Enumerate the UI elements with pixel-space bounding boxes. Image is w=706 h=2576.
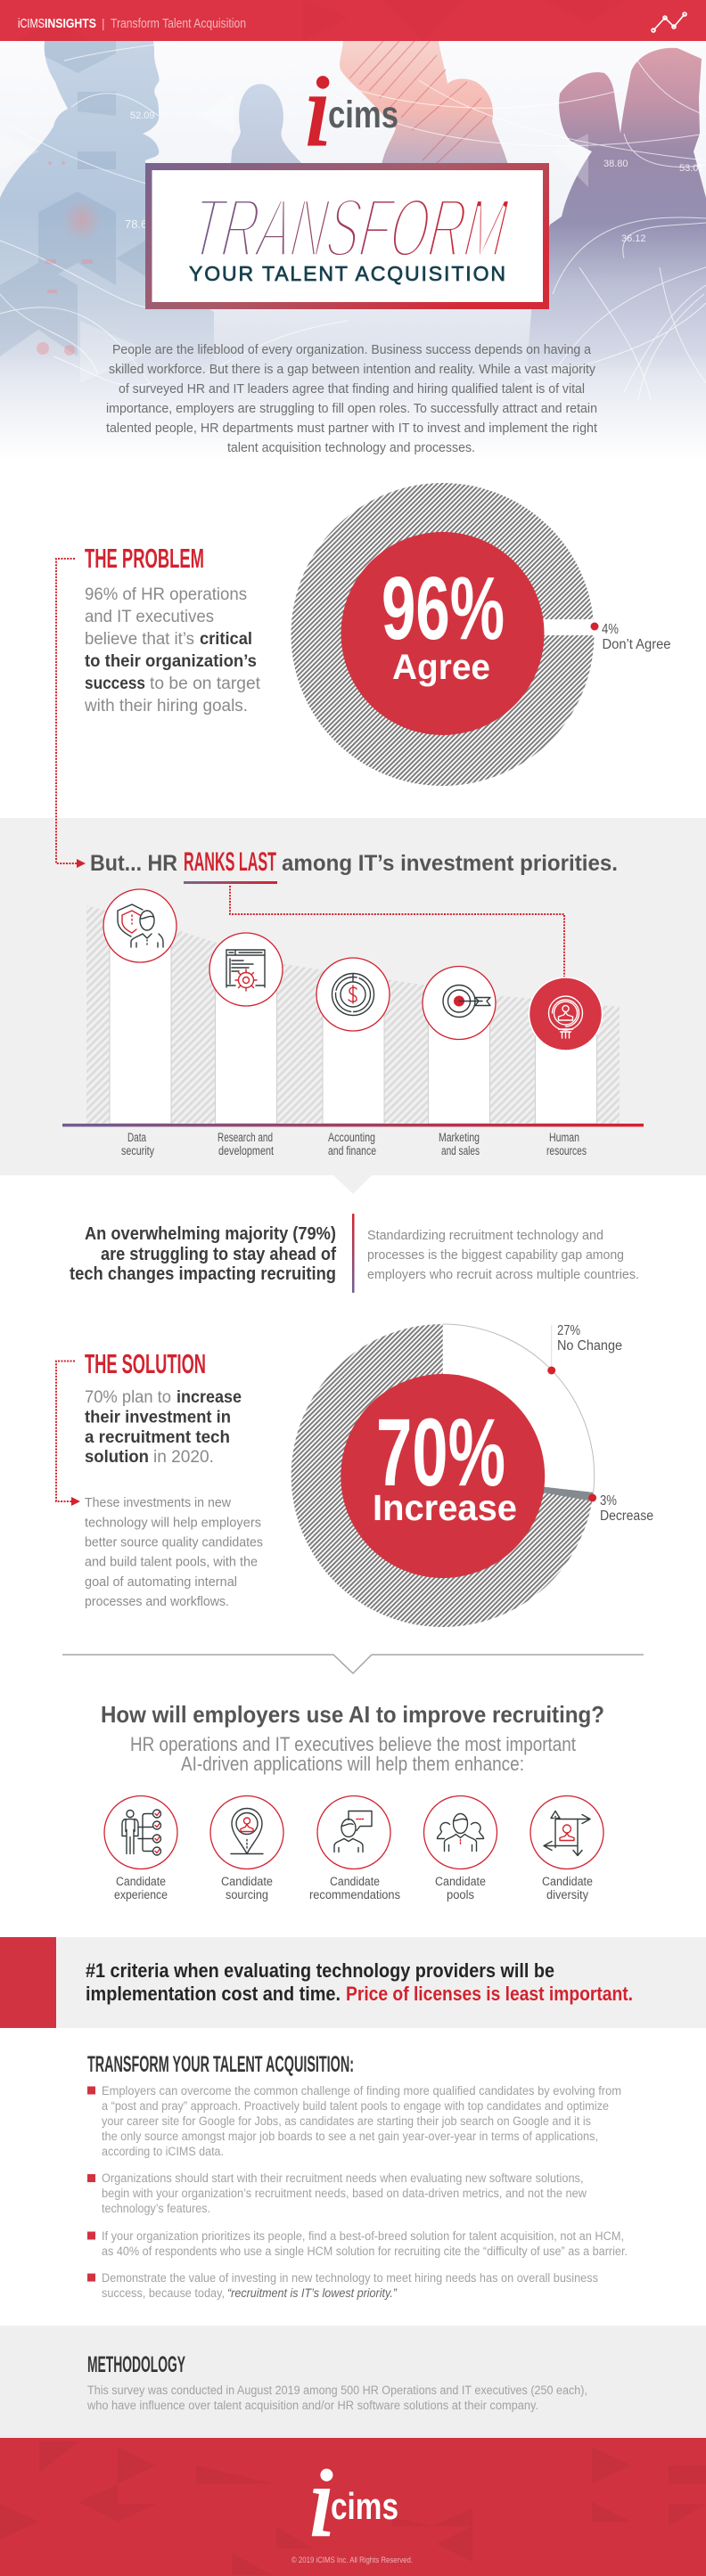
hero data readouts: 78.6: [125, 217, 147, 231]
bullet 2: technology’s features.: [102, 2202, 210, 2215]
heading: the solution: THE SOLUTION: [85, 1348, 206, 1379]
hero building hatch: [349, 41, 487, 165]
bar: human resources: [535, 1014, 597, 1124]
criteria text: [86, 1959, 633, 2005]
criteria text: Price of licenses is least important.: [346, 1983, 633, 2005]
iCIMS logo: i: [303, 53, 332, 167]
capability gap note: employers who recruit across multiple countries.: [367, 1267, 639, 1282]
hero red glow: [62, 199, 102, 241]
icon: browser window with gear: [209, 933, 283, 1006]
bullet 3: If your organization prioritizes its people, find a best-of-breed solution for talent acquisition, not an HCM,: [102, 2229, 624, 2243]
icon: human resources badge: [530, 977, 603, 1051]
bar: marketing and sales: [428, 1002, 490, 1124]
AI labels: Candidate: [435, 1875, 486, 1888]
slice: decrease: [443, 1476, 594, 1501]
copyright: © 2019 iCIMS Inc. All Rights Reserved.: [291, 2556, 413, 2565]
heading: AI question: How will employers use AI to improve recruiting?: [101, 1701, 604, 1728]
heading: recommendations: TRANSFORM YOUR TALENT ACQUISITION:: [87, 2052, 354, 2077]
chart category labels: security: [121, 1144, 154, 1157]
AI labels: Candidate: [116, 1875, 166, 1888]
AI labels: sourcing: [226, 1888, 268, 1901]
icon: candidate diversity: [530, 1796, 603, 1869]
hero red pips: [37, 161, 93, 356]
section divider with notch: [62, 1655, 644, 1673]
solution statement: in 2020.: [153, 1448, 214, 1467]
bullet 3: as 40% of respondents who use a single HCM solution for recruiting cite the “difficulty of use” as a barrier.: [102, 2245, 628, 2258]
AI labels: Candidate: [542, 1875, 593, 1888]
panel: 79 percent stat: [70, 1214, 639, 1293]
chart category labels: Marketing: [439, 1131, 480, 1144]
vertical divider: [352, 1214, 355, 1293]
icon: candidate pools: [424, 1796, 497, 1869]
AI labels: [114, 1875, 593, 1901]
callout: 4 percent: [590, 622, 670, 652]
criteria text: implementation cost and time.: [86, 1983, 341, 2005]
AI subheading: AI-driven applications will help them enhance:: [181, 1753, 524, 1775]
chart axis: [62, 1124, 644, 1126]
panel: methodology: [0, 2326, 706, 2438]
header brand: [18, 16, 246, 31]
stat statement: An overwhelming majority (79%): [85, 1224, 336, 1244]
solution detail: [85, 1495, 263, 1609]
header brand: |: [102, 16, 105, 30]
title: TRANSFORM: TRANSFORM: [186, 182, 513, 275]
methodology text: This survey was conducted in August 2019 among 500 HR Operations and IT executives (250 each),: [87, 2384, 587, 2397]
chart category labels: Human: [549, 1131, 579, 1144]
methodology text: [86, 2384, 587, 2412]
hero data readouts: 52.09: [130, 110, 155, 121]
intro paragraph: [106, 342, 598, 455]
iCIMS logo: [303, 53, 398, 167]
solution statement: [85, 1388, 242, 1467]
panel: criteria band: [0, 1937, 706, 2028]
value: 70%: 70%: [376, 1398, 505, 1506]
value: 96%: 96%: [382, 559, 505, 658]
hero background: [0, 41, 706, 461]
chart category labels: [121, 1131, 587, 1157]
hero data readouts: 53.07: [679, 163, 704, 174]
icon: shield and person: [103, 889, 176, 962]
bar: data security: [110, 926, 171, 1124]
solution statement: 70% plan to: [85, 1388, 171, 1407]
icon: candidate sourcing: [210, 1796, 283, 1869]
solution detail: goal of automating internal: [85, 1574, 237, 1590]
problem text: believe that it’s: [85, 630, 194, 649]
hero triangle pattern: [0, 41, 145, 356]
methodology text: who have influence over talent acquisition and/or HR software solutions at their company.: [86, 2399, 538, 2412]
headline: HR ranks last: [90, 847, 618, 884]
stat statement: tech changes impacting recruiting: [70, 1264, 336, 1284]
hero data readouts: [125, 110, 704, 244]
chart category labels: Accounting: [328, 1131, 375, 1144]
hero data readouts: 36.12: [621, 233, 646, 244]
chart category labels: and finance: [328, 1144, 376, 1157]
bullet 2: [87, 2171, 587, 2215]
value label: Agree: Agree: [392, 648, 490, 687]
callout: 3 percent: 3%: [600, 1493, 617, 1509]
panel: recommendations: [87, 2052, 628, 2300]
headline: HR ranks last: among IT’s investment priorities.: [282, 851, 618, 876]
callout: 27 percent: No Change: [557, 1338, 622, 1353]
header triangles: [18, 0, 624, 41]
dotted connector: ranks last to HR: [230, 886, 564, 977]
callout: 4 percent: Don’t Agree: [603, 637, 670, 652]
dotted connector: solution: [56, 1362, 80, 1506]
problem text: [84, 585, 261, 716]
panel: grey priorities band: [0, 818, 706, 1194]
panel: the solution: [85, 1348, 263, 1609]
panel: AI applications: [101, 1701, 604, 1901]
callout: 3 percent: [588, 1493, 653, 1524]
chart: IT investment priorities: [62, 905, 644, 1126]
bullet 3: [87, 2229, 628, 2258]
heading: methodology: METHODOLOGY: [87, 2352, 185, 2377]
problem text: critical: [200, 630, 252, 649]
icon: candidate experience: [104, 1796, 177, 1869]
intro paragraph: skilled workforce. But there is a gap between intention and reality. While a vast majority: [109, 362, 595, 377]
dotted connector: problem to priorities: [56, 559, 86, 868]
bullet 1: [87, 2084, 621, 2158]
slice: no change: [443, 1324, 595, 1492]
silhouette: left person: [0, 41, 214, 379]
hero bottom fade: [0, 352, 706, 461]
bullet 4: “recruitment is IT’s lowest priority.”: [227, 2286, 397, 2300]
callout: 27 percent: 27%: [557, 1323, 580, 1338]
heading: the problem: THE PROBLEM: [85, 543, 204, 574]
chart: 70 percent donut: [291, 1323, 653, 1627]
problem text: and IT executives: [85, 608, 214, 626]
AI subheading: HR operations and IT executives believe the most important: [130, 1733, 576, 1755]
stat statement: are struggling to stay ahead of: [101, 1245, 336, 1264]
iCIMS logo: white: cims: [331, 2485, 398, 2527]
problem text: to their organization’s: [85, 652, 257, 671]
problem text: success: [85, 675, 145, 693]
bullet 4: Demonstrate the value of investing in new technology to meet hiring needs has on overall business: [102, 2271, 598, 2285]
intro paragraph: of surveyed HR and IT leaders agree that finding and hiring qualified talent is of vital: [119, 381, 585, 397]
capability gap note: processes is the biggest capability gap among: [367, 1247, 624, 1263]
bullet 1: your career site for Google for Jobs, as candidates are starting their job search on Google and it is: [102, 2114, 591, 2128]
headline: HR ranks last: But... HR: [90, 851, 177, 876]
chart hatch background: [86, 905, 620, 1124]
intro paragraph: People are the lifeblood of every organization. Business success depends on having a: [112, 342, 592, 357]
bar: research and development: [216, 969, 276, 1124]
value label: Increase: Increase: [373, 1487, 517, 1528]
hero data readouts: 38.80: [603, 159, 628, 169]
solution detail: technology will help employers: [85, 1515, 261, 1531]
title box: [145, 163, 549, 309]
panel: footer: [0, 2438, 706, 2576]
problem text: 96% of HR operations: [85, 585, 247, 604]
intro paragraph: importance, employers are struggling to fill open roles. To successfully attract and retain: [106, 401, 597, 416]
chart category labels: Data: [127, 1131, 146, 1144]
hero network curves: [0, 41, 706, 401]
solution detail: processes and workflows.: [85, 1594, 229, 1609]
bar: accounting and finance: [323, 994, 384, 1124]
solution statement: their investment in: [85, 1408, 231, 1427]
solution statement: solution: [85, 1448, 149, 1467]
iCIMS logo: white: i: [308, 2448, 335, 2556]
criteria text: #1 criteria when evaluating technology providers will be: [86, 1959, 554, 1982]
header brand: iCIMS: [18, 17, 45, 31]
solution detail: These investments in new: [85, 1495, 231, 1510]
hero light triangles: [0, 94, 588, 454]
AI labels: pools: [447, 1888, 474, 1901]
solution detail: better source quality candidates: [85, 1534, 263, 1550]
icon: target with arrow: [423, 966, 496, 1039]
panel: the problem: [84, 543, 261, 716]
bullet 1: according to iCIMS data.: [102, 2145, 224, 2158]
intro paragraph: talent acquisition technology and processes.: [227, 440, 475, 455]
icon: dollar coin: [316, 958, 390, 1031]
bullet 4: [87, 2271, 598, 2300]
bullet 1: Employers can overcome the common challenge of finding more qualified candidates by evolving from: [102, 2084, 621, 2098]
bullet 1: the only source amongst major job boards to see a net gain year-over-year in terms of applications,: [102, 2130, 598, 2143]
AI labels: diversity: [546, 1888, 588, 1901]
capability gap note: [367, 1228, 639, 1282]
silhouette: right pair: [526, 48, 706, 379]
bullet 2: Organizations should start with their recruitment needs when evaluating new software solutions,: [102, 2171, 583, 2185]
chart category labels: resources: [546, 1144, 587, 1157]
solution statement: a recruitment tech: [85, 1428, 230, 1447]
AI labels: Candidate: [330, 1875, 380, 1888]
title: subtitle: YOUR TALENT ACQUISITION: [189, 262, 505, 285]
bullet 2: begin with your organization’s recruitment needs, based on data-driven metrics, and not the new: [102, 2187, 587, 2200]
callout: 4 percent: 4%: [602, 622, 619, 637]
callout: 3 percent: Decrease: [600, 1509, 653, 1524]
solution detail: and build talent pools, with the: [85, 1554, 258, 1570]
stat statement: [70, 1224, 336, 1284]
icon: line chart: [652, 12, 686, 32]
header brand: INSIGHTS: [45, 16, 96, 31]
callout: 27 percent: [547, 1323, 622, 1374]
capability gap note: Standardizing recruitment technology and: [367, 1228, 603, 1243]
silhouette: small centre-left person: [231, 84, 303, 165]
chart category labels: development: [218, 1144, 274, 1157]
top header bar: [0, 0, 706, 41]
AI subheading: [130, 1733, 576, 1775]
bullet 1: a “post and pray” approach. Proactively build talent pools to engage with top candidates and optimize: [102, 2099, 609, 2113]
icon: candidate recommendations: [317, 1796, 390, 1869]
solution statement: increase: [176, 1388, 242, 1407]
AI labels: recommendations: [309, 1888, 400, 1901]
AI labels: Candidate: [221, 1875, 273, 1888]
headline: HR ranks last: RANKS LAST: [184, 847, 276, 877]
problem text: to be on target: [150, 675, 261, 693]
AI labels: experience: [114, 1888, 168, 1901]
intro paragraph: talented people, HR departments must partner with IT to invest and implement the right: [106, 421, 598, 436]
iCIMS logo: cims: [328, 94, 398, 136]
problem text: with their hiring goals.: [84, 697, 248, 716]
chart: 96 percent donut: [291, 483, 670, 786]
chart category labels: Research and: [218, 1131, 273, 1144]
bullet 4: success, because today,: [102, 2286, 225, 2300]
chart category labels: and sales: [441, 1144, 480, 1157]
footer triangle pattern: [0, 2441, 706, 2575]
iCIMS logo: white: [308, 2448, 398, 2556]
silhouette: centre peach person: [340, 41, 508, 165]
header brand: Transform Talent Acquisition: [111, 17, 246, 31]
